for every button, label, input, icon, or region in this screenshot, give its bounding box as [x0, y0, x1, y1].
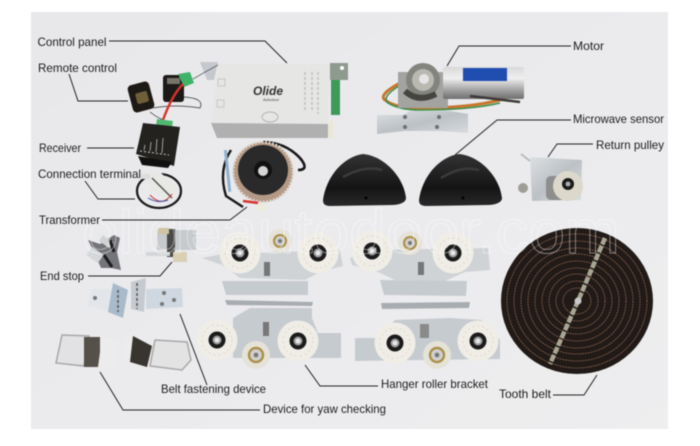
- end stop: [146, 228, 196, 262]
- label: Return pulley: [548, 138, 664, 157]
- label: Tooth belt: [499, 375, 597, 401]
- label: Remote control: [38, 61, 128, 101]
- remote control and wiring: [127, 65, 218, 127]
- label: Hanger roller bracket: [305, 365, 489, 391]
- microwave sensor right: [419, 154, 502, 206]
- transformer: [223, 142, 305, 211]
- label: Motor: Motor: [573, 39, 604, 53]
- hanger roller bracket bottom left: [196, 308, 341, 369]
- label: Remote control: Remote control: [38, 61, 117, 75]
- label: End stop: End stop: [40, 269, 84, 283]
- label: Control panel: Control panel: [38, 35, 106, 49]
- label: Microwave sensor: Microwave sensor: [573, 112, 664, 126]
- label: Device for yaw checking: Device for yaw checking: [263, 402, 386, 416]
- label: Receiver: Receiver: [39, 141, 81, 155]
- label: Return pulley: Return pulley: [596, 138, 664, 152]
- hanger roller bracket top right: [350, 230, 490, 309]
- motor: [377, 63, 524, 134]
- label: Belt fastening device: [161, 314, 266, 396]
- control panel unit: [200, 62, 348, 138]
- label: Transformer: Transformer: [39, 213, 100, 227]
- label: Microwave sensor: [455, 112, 664, 155]
- label: Receiver: [39, 141, 134, 155]
- watermark: olideautodoor.com: [82, 198, 620, 267]
- return pulley: [518, 154, 583, 201]
- connection terminal: [137, 172, 181, 208]
- microwave sensor left: [323, 154, 406, 206]
- label: Motor: [447, 39, 604, 66]
- label: End stop: [40, 262, 172, 283]
- receiver box: [136, 123, 180, 168]
- device for yaw checking: [56, 335, 191, 370]
- hanger roller bracket bottom right: [355, 318, 500, 369]
- screws pile: [86, 235, 121, 270]
- label: Belt fastening device: Belt fastening device: [161, 382, 266, 396]
- tooth belt coil: [501, 228, 653, 374]
- control panel unit: Olide: [253, 84, 283, 98]
- label: Connection terminal: Connection terminal: [38, 167, 141, 181]
- hanger roller bracket top left: [202, 229, 343, 306]
- belt fastening device: [87, 278, 183, 318]
- label: Transformer: [39, 207, 247, 227]
- label: Device for yaw checking: [100, 372, 386, 416]
- label: Hanger roller bracket: Hanger roller bracket: [381, 377, 489, 391]
- label: Tooth belt: Tooth belt: [499, 387, 552, 401]
- label: Control panel: [38, 35, 287, 63]
- control panel unit: Autodoor: [263, 97, 280, 102]
- label: Connection terminal: [38, 167, 141, 199]
